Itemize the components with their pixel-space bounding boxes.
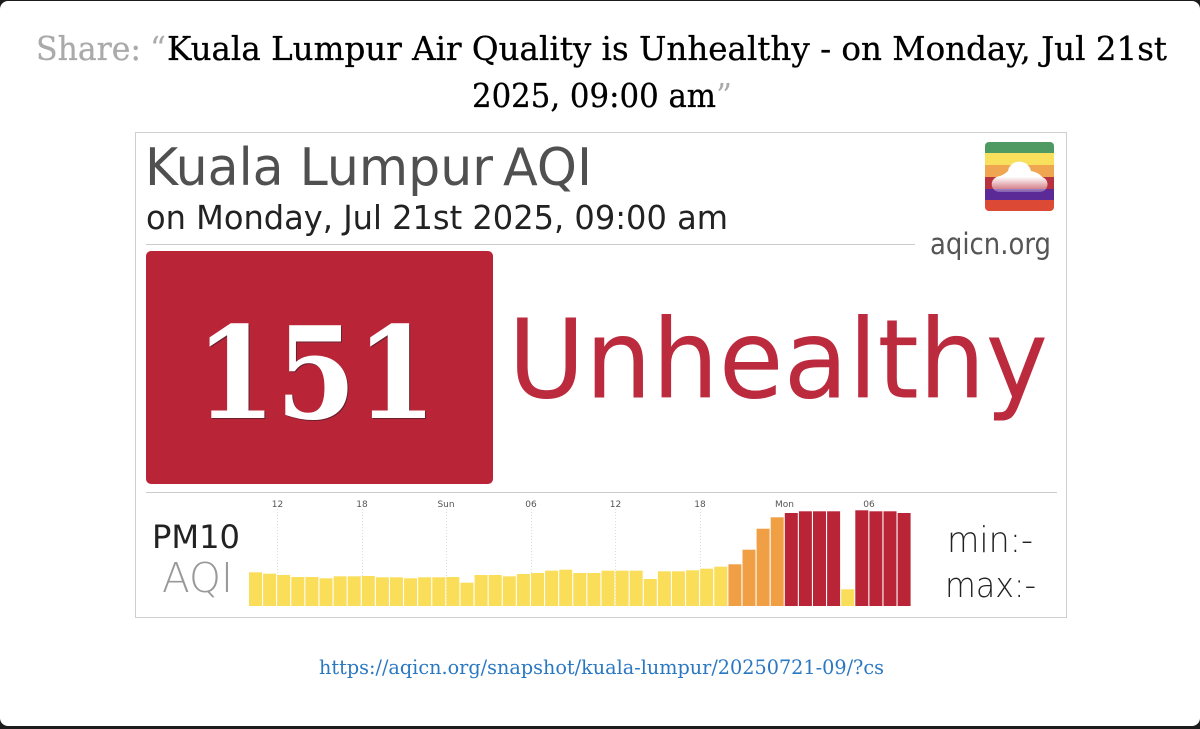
panel: AQI card bbox=[136, 132, 1066, 618]
bar chart: PM10 AQI history bbox=[249, 500, 911, 606]
heading: share text: ” bbox=[716, 76, 732, 115]
snapshot link: https://aqicn.org/snapshot/kuala-lumpur/20250721-09/?cs bbox=[319, 655, 884, 679]
bar chart: PM10 AQI history: 18 bbox=[694, 500, 706, 510]
bar chart: PM10 AQI history: Mon bbox=[775, 500, 794, 510]
bar chart: PM10 AQI history: 12 bbox=[272, 500, 283, 510]
heading: share text: Share: bbox=[36, 29, 141, 68]
heading: share text bbox=[36, 29, 1167, 115]
heading: share text: “ bbox=[150, 29, 166, 68]
status label: Unhealthy bbox=[508, 296, 1048, 424]
heading: share text: Kuala Lumpur Air Quality is Unhealthy - on Monday, Jul 21st bbox=[167, 29, 1167, 68]
heading: share text: 2025, 09:00 am bbox=[472, 76, 716, 115]
bar chart: PM10 AQI history: 06 bbox=[525, 500, 537, 510]
AQI value box bbox=[146, 251, 493, 484]
site name: aqicn.org bbox=[930, 227, 1051, 261]
max value: max:- bbox=[945, 566, 1036, 606]
bar chart: PM10 AQI history: Sun bbox=[437, 500, 455, 510]
card title: AQI bbox=[503, 138, 592, 198]
AQI value box: 151 bbox=[196, 300, 438, 449]
bar chart: PM10 AQI history: 12 bbox=[610, 500, 621, 510]
icon: aqicn logo bbox=[985, 142, 1054, 211]
PM10 label: PM10 bbox=[152, 518, 240, 556]
bar chart: PM10 AQI history: 18 bbox=[356, 500, 368, 510]
card date: on Monday, Jul 21st 2025, 09:00 am bbox=[146, 198, 728, 237]
card title: Kuala Lumpur bbox=[145, 138, 494, 198]
AQI value box: 151 bbox=[196, 299, 436, 448]
min value: min:- bbox=[947, 520, 1033, 561]
AQI label: AQI bbox=[162, 554, 233, 602]
bar chart: PM10 AQI history: 06 bbox=[863, 500, 875, 510]
